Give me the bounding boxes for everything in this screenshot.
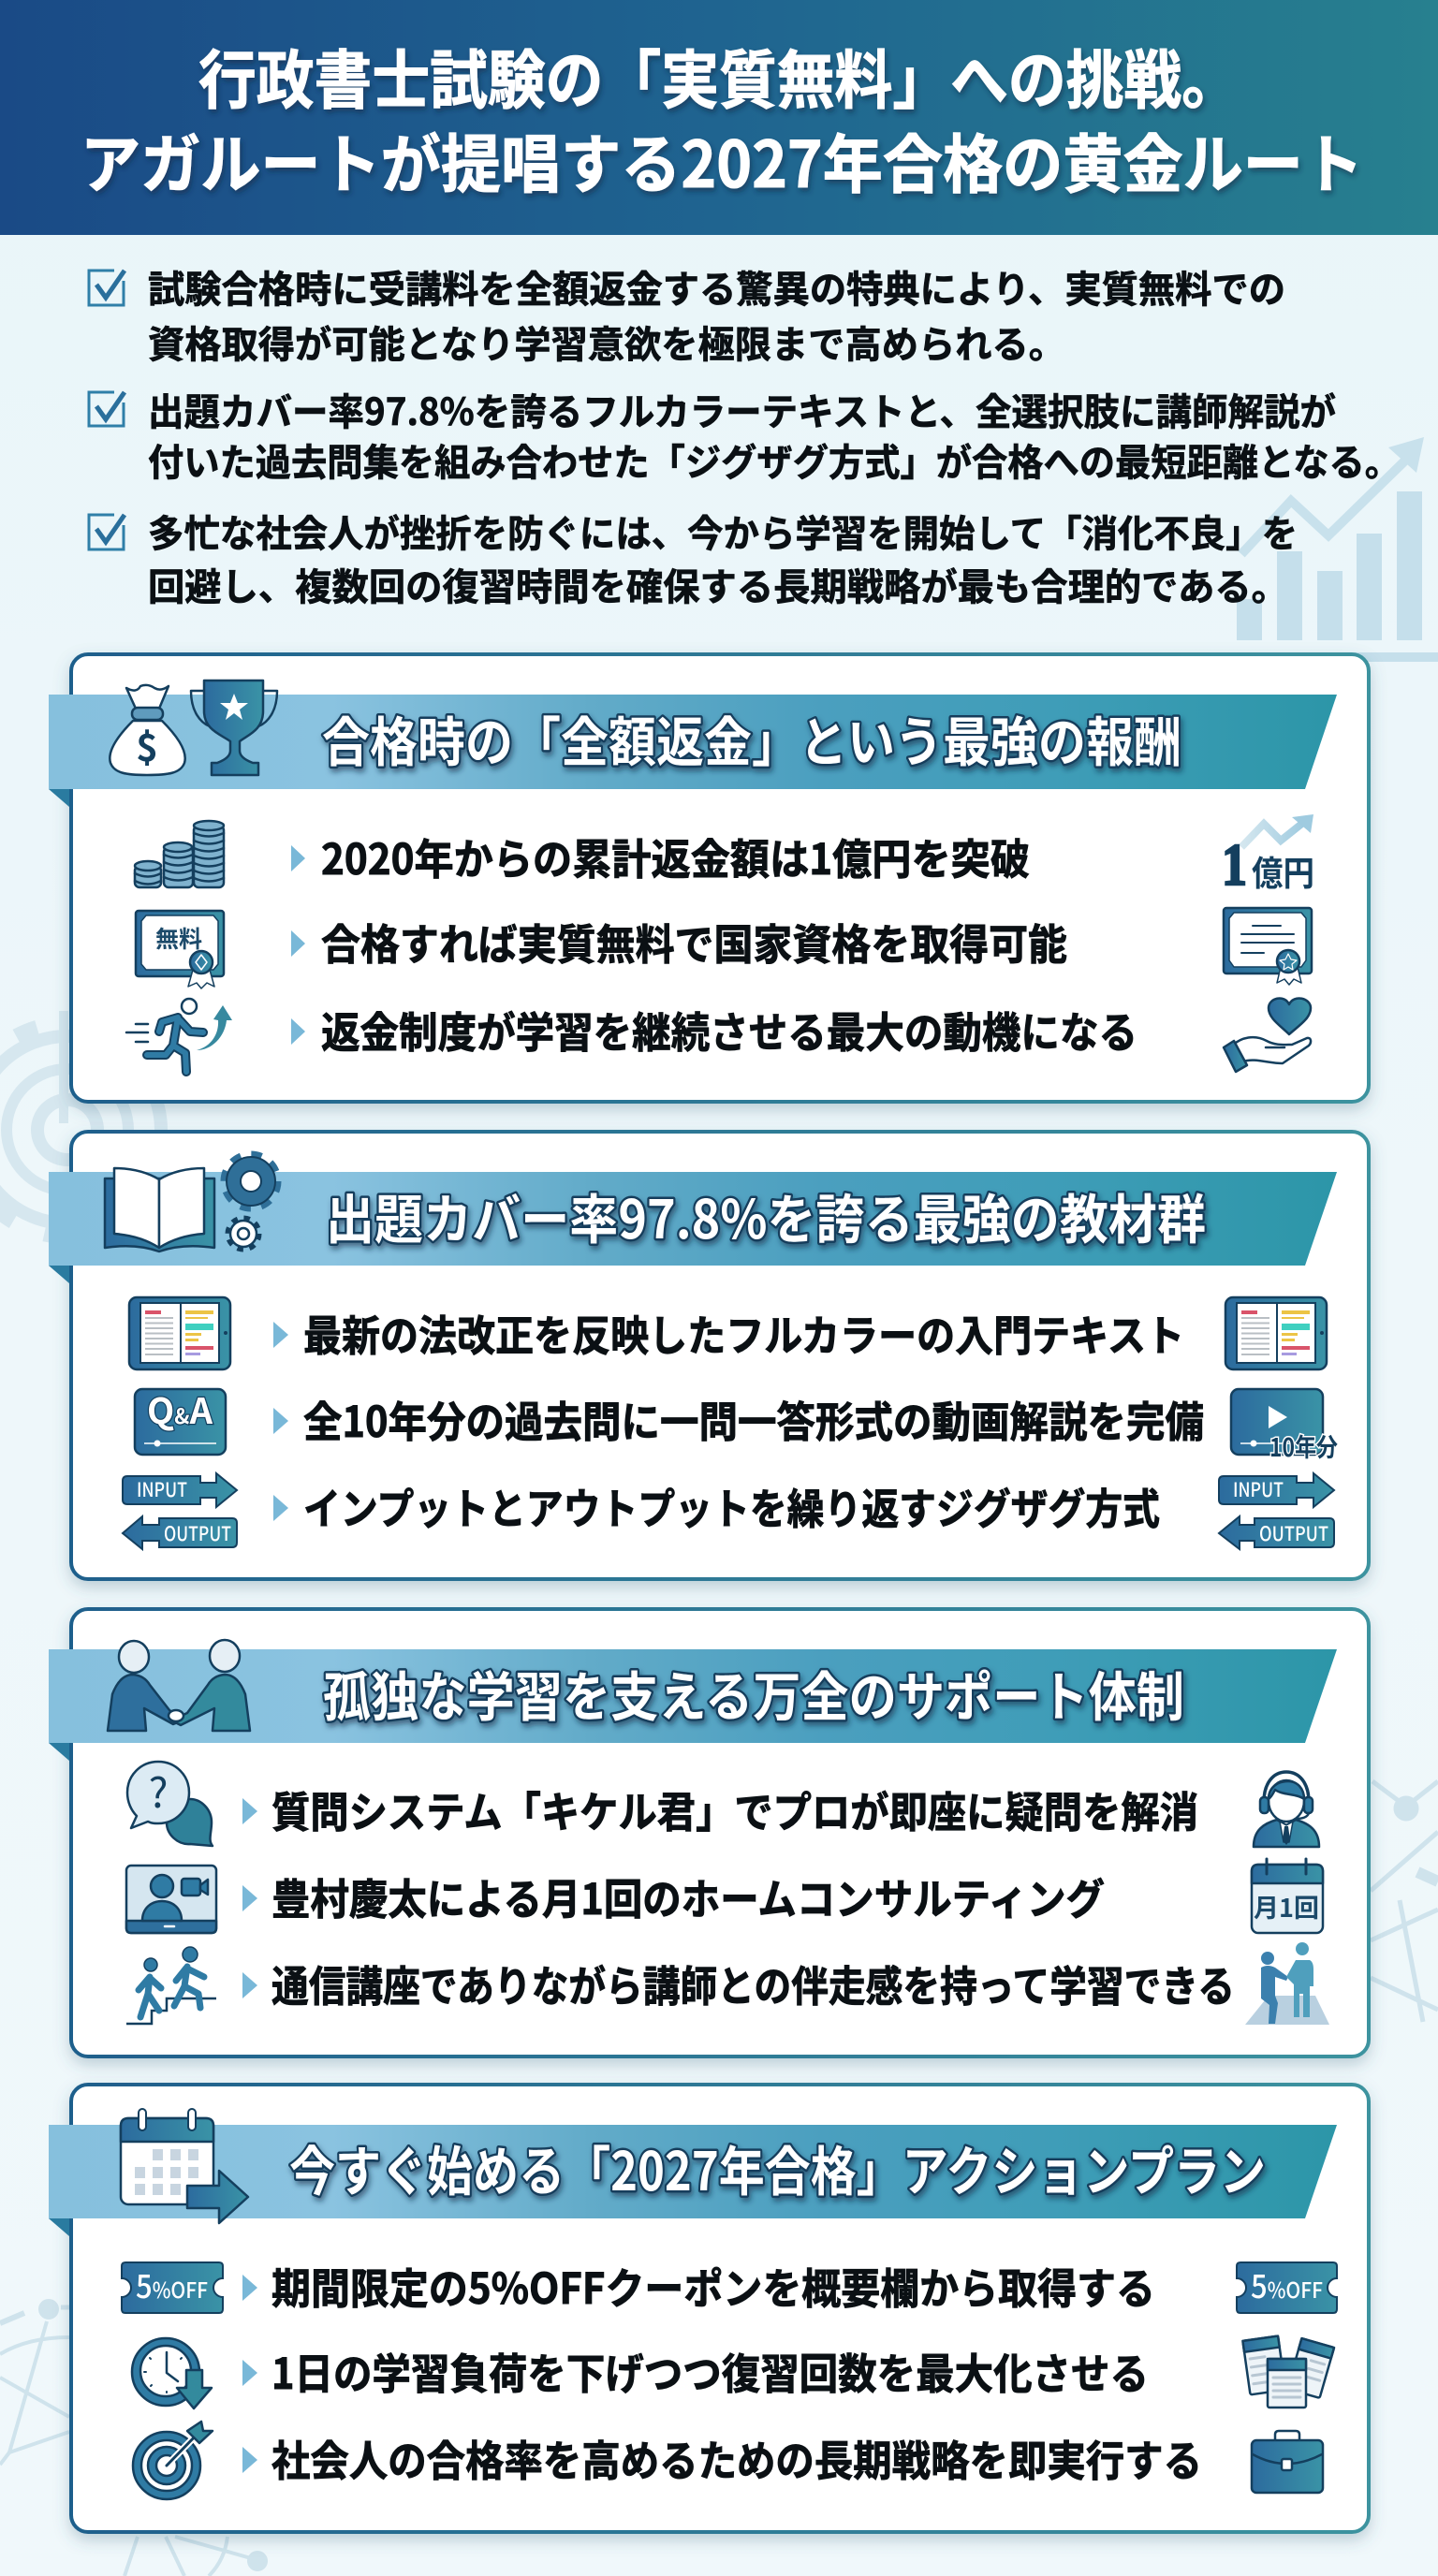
- marker and text rows: [242, 1778, 1235, 2013]
- icon: input output arrows: OUTPUT: [164, 1519, 231, 1547]
- icon: certificate 無料: [136, 911, 224, 988]
- icon: coupon: 5%OFF: [136, 2261, 208, 2307]
- item: motivation: 返金制度が学習を継続させる最大の動機になる: [321, 999, 1137, 1060]
- text block: summary 1: [148, 259, 1285, 369]
- icon: checkbox 1: [89, 271, 125, 305]
- icon: input output arrows: [123, 1473, 237, 1549]
- marker and text rows: [273, 1302, 1204, 1536]
- icon: question chat bubbles: ?: [149, 1760, 168, 1820]
- icon: calendar 月1回: [1252, 1859, 1323, 1933]
- icon: money bag: [110, 685, 185, 775]
- item: question system: 質問システム「キケル君」でプロが即座に疑問を解消: [271, 1778, 1198, 1839]
- banner: [49, 695, 1337, 807]
- item: past exams: 全10年分の過去問に一問一答形式の動画解説を完備: [303, 1388, 1204, 1449]
- marker 1: [291, 845, 305, 871]
- title: アガルートが提唱する2027年合格の黄金ルート: [81, 113, 1363, 206]
- icon: video 10年分: 10年分: [1269, 1427, 1338, 1464]
- icon: calendar 月1回: 月1回: [1254, 1888, 1319, 1925]
- icon: climbers on stairs: [126, 1947, 216, 2024]
- icon: checkbox 2: [89, 392, 125, 426]
- icon: operator with headset: [1254, 1772, 1319, 1847]
- icon: target and arrow: [133, 2422, 213, 2499]
- text block: summary 2: [148, 382, 1401, 487]
- icon: certificate: [1224, 908, 1312, 985]
- icon: coupon right: [1237, 2261, 1337, 2313]
- icon: input output arrows right: [1219, 1473, 1334, 1549]
- icon: Q&A video: Q&A: [147, 1383, 213, 1434]
- icon: heart on hand: [1224, 998, 1311, 1072]
- icon: tablet right: [1225, 1297, 1327, 1369]
- icon: briefcase: [1252, 2431, 1323, 2493]
- banner: [49, 1172, 1337, 1283]
- icon: stacked documents: [1242, 2336, 1334, 2408]
- icon: input output arrows right: INPUT: [1233, 1475, 1284, 1503]
- banner: [49, 2125, 1337, 2236]
- background decoration: right network: [1371, 1781, 1438, 2022]
- marker 2: [242, 2360, 257, 2386]
- icon: trophy: [191, 681, 277, 775]
- text block: summary 1: 試験合格時に受講料を全額返金する驚異の特典により、実質無料での: [148, 259, 1285, 314]
- marker 1: [242, 1798, 257, 1824]
- text block: summary 1: 資格取得が可能となり学習意欲を極限まで高められる。: [148, 315, 1065, 369]
- icon: 1億円 with arrow: 1: [1222, 831, 1247, 898]
- text block: summary 2: 出題カバー率97.8%を誇るフルカラーテキストと、全選択肢に講師解説が: [148, 382, 1336, 436]
- icon: coupon right: 5%OFF: [1251, 2261, 1323, 2307]
- banner: [49, 1649, 1337, 1761]
- text block: summary 3: 多忙な社会人が挫折を防ぐには、今から学習を開始して「消化不良」を: [148, 504, 1298, 558]
- background decoration: gear and target: [0, 1011, 174, 1237]
- item: free qualification: 合格すれば実質無料で国家資格を取得可能: [321, 911, 1067, 972]
- marker 3: [242, 2447, 257, 2473]
- item: accompaniment: 通信講座でありながら講師との伴走感を持って学習できる: [271, 1953, 1235, 2013]
- marker 3: [242, 1972, 257, 1998]
- summary: check bullets: [89, 259, 1401, 611]
- icon: 1億円 with arrow: 億円: [1252, 845, 1314, 896]
- marker 3: [291, 1018, 305, 1045]
- icon: video 10年分: [1231, 1389, 1338, 1464]
- marker 1: [273, 1322, 288, 1348]
- icon: 1億円 with arrow: [1222, 814, 1314, 898]
- marker 1: [242, 2275, 257, 2301]
- icon: Q&A video: [135, 1383, 226, 1455]
- panel 4: action plan: [49, 2085, 1369, 2532]
- background decoration: bottom-left network: [0, 2301, 266, 2576]
- icon: calendar with arrow: [121, 2109, 248, 2223]
- marker 2: [242, 1885, 257, 1911]
- text block: summary 3: [148, 504, 1298, 611]
- item: textbook: 最新の法改正を反映したフルカラーの入門テキスト: [303, 1302, 1184, 1363]
- text block: summary 3: 回避し、複数回の復習時間を確保する長期戦略が最も合理的である。: [148, 557, 1288, 611]
- item: refund total: 2020年からの累計返金額は1億円を突破: [321, 826, 1030, 886]
- icon: two people on platform: [1245, 1942, 1329, 2025]
- icon: input output arrows right: OUTPUT: [1259, 1519, 1328, 1547]
- marker and text rows: [291, 826, 1137, 1060]
- title: [81, 29, 1363, 206]
- icon: tablet: [129, 1297, 230, 1369]
- icon: certificate 無料: 無料: [155, 921, 202, 955]
- heading: 孤独な学習を支える万全のサポート体制: [323, 1655, 1184, 1732]
- marker and text rows: [242, 2255, 1202, 2488]
- icon: input output arrows: INPUT: [137, 1475, 187, 1503]
- heading: 出題カバー率97.8%を誇る最強の教材群: [326, 1178, 1206, 1254]
- icon: video call: [126, 1866, 216, 1933]
- icon: coupon: [122, 2261, 223, 2313]
- item: daily load: 1日の学習負荷を下げつつ復習回数を最大化させる: [271, 2340, 1149, 2401]
- panel 3: support: [49, 1609, 1369, 2056]
- icon: coin stacks: [135, 821, 224, 887]
- icon: runner with arrow: [126, 999, 232, 1072]
- icon: large gear: [224, 1154, 278, 1208]
- item: zigzag: インプットとアウトプットを繰り返すジグザグ方式: [303, 1475, 1160, 1536]
- item: coupon: 期間限定の5%OFFクーポンを概要欄から取得する: [271, 2255, 1155, 2316]
- title: 行政書士試験の「実質無料」への挑戦。: [198, 29, 1240, 122]
- icon: handshake: [108, 1640, 250, 1731]
- icon: money bag: $: [136, 718, 158, 772]
- background decoration: rising bar chart: [1237, 437, 1438, 662]
- panel 2: study materials: [49, 1132, 1369, 1579]
- panel 1: full refund: [49, 654, 1369, 1102]
- icon: small gear: [227, 1218, 259, 1250]
- item: long-term strategy: 社会人の合格率を高めるための長期戦略を即実行する: [271, 2427, 1202, 2488]
- marker 2: [291, 930, 305, 957]
- marker 2: [273, 1408, 288, 1434]
- item: home consulting: 豊村慶太による月1回のホームコンサルティング: [271, 1866, 1105, 1926]
- marker 3: [273, 1495, 288, 1521]
- header band: [0, 0, 1438, 235]
- icon: question chat bubbles: [127, 1760, 213, 1846]
- text block: summary 2: 付いた過去問集を組み合わせた「ジグザグ方式」が合格への最短距離となる。: [148, 432, 1401, 487]
- icon: checkbox 3: [89, 515, 125, 549]
- icon: open book: [105, 1168, 214, 1251]
- heading: 今すぐ始める「2027年合格」アクションプラン: [289, 2130, 1266, 2206]
- heading: 合格時の「全額返金」という最強の報酬: [322, 700, 1181, 777]
- icon: clock with down arrow: [132, 2338, 212, 2408]
